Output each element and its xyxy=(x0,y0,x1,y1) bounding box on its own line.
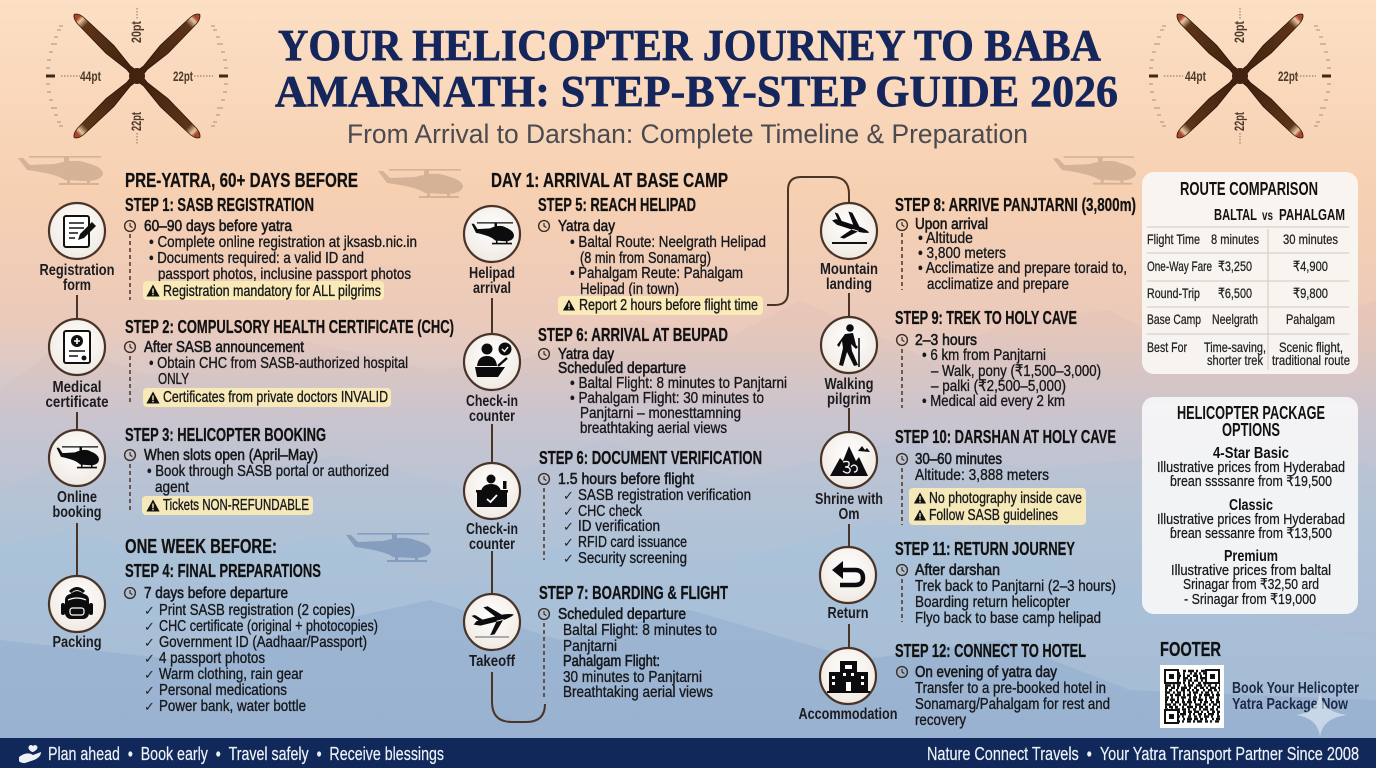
rotor decoration right: 22pt xyxy=(1231,112,1247,131)
label: check-in counter: Check-in xyxy=(466,393,518,410)
step 10: No photography inside cave xyxy=(929,490,1082,507)
call to action xyxy=(1232,680,1359,737)
step 2: After SASB announcement xyxy=(144,339,304,356)
panel: route comparison: ROUTE COMPARISON xyxy=(1180,179,1318,199)
subtitle: From Arrival to Darshan: Complete Timeline & Preparation xyxy=(347,119,1028,149)
icon: packing xyxy=(49,576,105,632)
label: registration form xyxy=(40,262,114,294)
step 7: Baltal Flight: 8 minutes to xyxy=(563,622,717,639)
label: mountain landing: Mountain xyxy=(820,261,878,278)
step 5: Yatra day xyxy=(558,218,615,235)
label: check-in counter 2: counter xyxy=(469,536,515,553)
label: medical certificate: certificate xyxy=(46,394,109,411)
panel: route comparison: Pahalgam xyxy=(1286,311,1335,327)
step 3: • Book through SASB portal or authorized xyxy=(147,463,389,480)
step 4: ✓ xyxy=(144,684,155,699)
step 4: ✓ xyxy=(144,604,155,619)
panel: route comparison: One-Way Fare xyxy=(1147,258,1212,274)
panel: route comparison: ₹4,900 xyxy=(1293,258,1328,274)
label: registration form: form xyxy=(63,277,91,294)
footer bar: Plan ahead • Book early • Travel safely • Receive blessings xyxy=(48,744,444,764)
step 6 verification: CHC check xyxy=(578,503,643,520)
step 6 arrival: STEP 6: ARRIVAL AT BEUPAD xyxy=(538,325,728,345)
icon: medical certificate xyxy=(49,319,105,375)
label: medical certificate xyxy=(46,379,109,411)
step 7: Scheduled departure xyxy=(558,606,686,623)
step 5: Report 2 hours before flight time xyxy=(579,297,758,314)
step 8: STEP 8: ARRIVE PANJTARNI (3,800m) xyxy=(895,195,1136,215)
panel: helicopter package options: 4-Star Basic xyxy=(1213,445,1289,462)
step 6 arrival xyxy=(538,325,787,437)
label: online booking: Online xyxy=(57,489,97,506)
panel: helicopter package options: ɓrean sessanre from ₹13,500 xyxy=(1170,525,1332,542)
step 4: ✓ xyxy=(144,652,155,667)
step 1 xyxy=(125,195,417,300)
step 1: • Complete online registration at jksasb.nic.in xyxy=(149,234,417,251)
step 5: Helipad (in town) xyxy=(580,281,679,298)
label: packing: Packing xyxy=(52,634,102,651)
step 6 verification: ✓ xyxy=(563,552,574,567)
step 9 xyxy=(895,308,1101,410)
step 4: Power bank, water bottle xyxy=(159,698,306,715)
step 10: Altitude: 3,888 meters xyxy=(915,467,1049,484)
step 2: STEP 2: COMPULSORY HEALTH CERTIFICATE (CHC) xyxy=(125,317,454,337)
rotor decoration right: 20pt xyxy=(1231,21,1247,43)
step 10: Follow SASB guidelines xyxy=(929,507,1058,524)
step 5: (8 min from Sonamarg) xyxy=(580,250,711,267)
panel: helicopter package options: OPTIONS xyxy=(1222,420,1280,440)
step 7: Pahalgam Flight: xyxy=(563,653,660,670)
panel: route comparison: Best For xyxy=(1147,339,1187,355)
step 6 verification: ✓ xyxy=(563,520,574,535)
step 6 verification xyxy=(539,448,762,567)
label: accommodation: Accommodation xyxy=(798,706,898,723)
step 8 xyxy=(895,195,1136,293)
step 10: 30–60 minutes xyxy=(915,451,1002,468)
icon: takeoff xyxy=(464,594,520,650)
icon: shrine with Om xyxy=(821,432,877,488)
step 6 arrival: • Pahalgam Flight: 30 minutes to xyxy=(570,390,764,407)
step 11: Boarding return helicopter xyxy=(915,594,1071,611)
panel: helicopter package options: Illustrative prices from Hyderabad xyxy=(1157,459,1345,476)
step 3: agent xyxy=(155,479,189,496)
step 11: STEP 11: RETURN JOURNEY xyxy=(895,539,1075,559)
label: takeoff: Takeoff xyxy=(469,653,516,670)
step 4 xyxy=(125,561,378,715)
panel: helicopter package options: Srinagar from ₹32,50 ard xyxy=(1183,576,1319,593)
step 4: ✓ xyxy=(144,620,155,635)
step 8: • Acclimatize and prepare toraid to, xyxy=(918,260,1127,277)
label: shrine with Om: Om xyxy=(838,506,860,523)
step 12: recovery xyxy=(915,712,966,729)
rotor decoration right: 44pt xyxy=(1185,68,1206,84)
label: mountain landing xyxy=(820,261,878,293)
call to action: Yatra Package Now xyxy=(1232,696,1349,713)
panel: route comparison: traditional route xyxy=(1272,352,1350,368)
step 2: Certificates from private doctors INVALID xyxy=(163,389,388,406)
QR code xyxy=(1160,665,1224,728)
connectors xyxy=(77,177,849,722)
label: check-in counter: counter xyxy=(469,408,515,425)
step 5: • Baltal Route: Neelgrath Helipad xyxy=(570,234,766,251)
step 6 verification: Security screening xyxy=(578,550,687,567)
label: helipad arrival: Helipad xyxy=(469,265,515,282)
step 6 arrival: • Baltal Flight: 8 minutes to Panjtarni xyxy=(570,375,787,392)
step 7 xyxy=(539,583,728,701)
step 11: Trek back to Panjtarni (2–3 hours) xyxy=(915,578,1116,595)
panel: route comparison: Neelgrath xyxy=(1212,311,1258,327)
step 5 xyxy=(538,195,766,315)
panel: helicopter package options: Illustrative prices from Hyderabad xyxy=(1157,511,1345,528)
step 11: Flyo back to base camp helipad xyxy=(915,610,1101,627)
step 3 xyxy=(125,425,389,515)
label: medical certificate: Medical xyxy=(52,379,102,396)
step 4: Warm clothing, rain gear xyxy=(159,666,304,683)
icon: walking pilgrim xyxy=(821,317,877,373)
step 3: Tickets NON-REFUNDABLE xyxy=(163,497,309,514)
step 9: – palki (₹2,500–5,000) xyxy=(931,378,1066,395)
icon: return xyxy=(820,547,876,603)
column 1 heading: PRE-YATRA, 60+ DAYS BEFORE xyxy=(125,170,358,192)
rotor decoration right: 22pt xyxy=(1278,68,1298,84)
icon: verification desk xyxy=(464,463,520,519)
step 6 verification: RFID card issuance xyxy=(578,534,687,551)
panel: helicopter package options xyxy=(1142,397,1358,614)
step 9: STEP 9: TREK TO HOLY CAVE xyxy=(895,308,1077,328)
rotor decoration left: 20pt xyxy=(128,21,144,43)
step 6 verification: STEP 6: DOCUMENT VERIFICATION xyxy=(539,448,762,468)
step 1: passport photos, inclusine passport photos xyxy=(158,266,411,283)
icon: helipad arrival xyxy=(464,206,520,262)
footer heading: FOOTER xyxy=(1160,639,1221,661)
footer bar xyxy=(0,738,1376,768)
one week heading: ONE WEEK BEFORE: xyxy=(125,536,277,558)
panel: route comparison: shorter trek xyxy=(1207,352,1264,368)
label: check-in counter 2 xyxy=(466,521,518,553)
step 6 verification: 1.5 hours before flight xyxy=(558,471,694,488)
panel: route comparison: PAHALGAM xyxy=(1279,207,1345,224)
step 6 verification: SASB registration verification xyxy=(578,487,751,504)
icon: check-in counter with person xyxy=(464,334,520,390)
step 4: STEP 4: FINAL PREPARATIONS xyxy=(125,561,321,581)
panel: route comparison: BALTAL xyxy=(1214,207,1257,224)
step 2 xyxy=(125,317,454,407)
label: check-in counter 2: Check-in xyxy=(466,521,518,538)
step 7: 30 minutes to Panjtarni xyxy=(563,669,702,686)
step 5: • Pahalgam Reute: Pahalgam xyxy=(570,265,743,282)
panel: route comparison: ₹9,800 xyxy=(1293,285,1328,301)
icon: online booking xyxy=(49,430,105,486)
title xyxy=(275,21,1118,116)
step 12: On evening of yatra day xyxy=(915,664,1057,681)
panel: route comparison xyxy=(1142,172,1358,374)
label: helipad arrival: arrival xyxy=(473,280,511,297)
panel: route comparison: vs xyxy=(1262,207,1273,223)
step 4: 4 passport photos xyxy=(159,650,265,667)
step 6 arrival: Yatra day xyxy=(558,346,614,363)
step 12: STEP 12: CONNECT TO HOTEL xyxy=(895,641,1086,661)
title: AMARNATH: STEP-BY-STEP GUIDE 2026 xyxy=(275,67,1118,116)
panel: route comparison: Base Camp xyxy=(1147,311,1201,327)
label: mountain landing: landing xyxy=(826,276,872,293)
panel: route comparison: Round-Trip xyxy=(1147,285,1200,301)
step 1: 60–90 days before yatra xyxy=(144,218,292,235)
step 6 verification: ✓ xyxy=(563,536,574,551)
panel: route comparison: ₹6,500 xyxy=(1218,285,1252,301)
label: shrine with Om: Shrine with xyxy=(815,491,883,508)
step 4: ✓ xyxy=(144,700,155,715)
step 4: Personal medications xyxy=(159,682,287,699)
panel: route comparison: Scenic flight, xyxy=(1279,339,1343,355)
label: online booking xyxy=(52,489,102,521)
label: registration form: Registration xyxy=(40,262,114,279)
icon: registration form xyxy=(49,203,105,259)
step 7: STEP 7: BOARDING & FLIGHT xyxy=(539,583,728,603)
label: return: Return xyxy=(828,605,868,622)
step 2: ONLY xyxy=(158,371,189,388)
step 11: After darshan xyxy=(915,562,1000,579)
panel: route comparison: 30 minutes xyxy=(1283,231,1338,247)
step 8: • Altitude xyxy=(918,230,973,247)
step 1: • Documents required: a valid ID and xyxy=(149,250,364,267)
step 12 xyxy=(895,641,1110,729)
step 4: ✓ xyxy=(144,636,155,651)
step 4: Print SASB registration (2 copies) xyxy=(159,602,355,619)
panel: route comparison: Flight Time xyxy=(1147,231,1200,247)
step 9: • 6 km from Panjtarni xyxy=(922,347,1046,364)
panel: route comparison: 8 minutes xyxy=(1211,231,1259,247)
step 2: • Obtain CHC from SASB-authorized hospital xyxy=(149,355,408,372)
label: shrine with Om xyxy=(815,491,883,523)
step 6 verification: ✓ xyxy=(563,505,574,520)
step 4: 7 days before departure xyxy=(144,585,288,602)
step 3: When slots open (April–May) xyxy=(144,447,318,464)
rotor decoration left: 22pt xyxy=(173,68,193,84)
panel: helicopter package options: Premium xyxy=(1224,548,1278,565)
icon: mountain landing xyxy=(821,203,877,259)
title: YOUR HELICOPTER JOURNEY TO BABA xyxy=(278,21,1101,70)
step 12: Transfer to a pre-booked hotel in xyxy=(915,680,1106,697)
step 3: STEP 3: HELICOPTER BOOKING xyxy=(125,425,326,445)
step 1: STEP 1: SASB REGISTRATION xyxy=(125,195,314,215)
rotor decoration left xyxy=(46,8,228,144)
step 7: Breathtaking aerial views xyxy=(563,684,713,701)
step 7: Panjtarni xyxy=(563,638,617,655)
panel: helicopter package options: Illustrative prices from baltal xyxy=(1171,562,1331,579)
step 8: • 3,800 meters xyxy=(918,245,1006,262)
rotor decoration right xyxy=(1149,8,1331,144)
label: online booking: booking xyxy=(52,504,102,521)
panel: helicopter package options: - Srinagar from ₹19,000 xyxy=(1184,591,1316,608)
step 10: STEP 10: DARSHAN AT HOLY CAVE xyxy=(895,427,1116,447)
step 6 arrival: breathtaking aerial views xyxy=(580,420,727,437)
step 4: CHC certificate (original + photocopies) xyxy=(159,618,378,635)
step 8: Upon arrival xyxy=(915,216,988,233)
panel: helicopter package options: Classic xyxy=(1229,497,1273,514)
step 10 xyxy=(895,427,1116,525)
label: check-in counter xyxy=(466,393,518,425)
step 9: – Walk, pony (₹1,500–3,000) xyxy=(931,363,1101,380)
step 1: Registration mandatory for ALL pilgrims xyxy=(163,283,381,300)
step 8: acclimatize and prepare xyxy=(927,276,1069,293)
column 2 heading: DAY 1: ARRIVAL AT BASE CAMP xyxy=(491,170,728,192)
panel: helicopter package options: ɓrean ssssanre from ₹19,500 xyxy=(1170,473,1332,490)
step 12: Sonamarg/Pahalgam for rest and xyxy=(915,696,1110,713)
step 4: Government ID (Aadhaar/Passport) xyxy=(159,634,367,651)
step 11 xyxy=(895,539,1116,627)
panel: route comparison: Time-saving, xyxy=(1204,339,1266,355)
step 9: • Medical aid every 2 km xyxy=(922,393,1065,410)
step 6 arrival: Scheduled departure xyxy=(558,360,686,377)
step 9: 2–3 hours xyxy=(915,332,977,349)
label: walking pilgrim: Walking xyxy=(824,376,874,393)
rotor decoration left: 22pt xyxy=(128,112,144,131)
step 6 verification: ID verification xyxy=(578,518,660,535)
rotor decoration left: 44pt xyxy=(80,68,101,84)
step 5: STEP 5: REACH HELIPAD xyxy=(538,195,696,215)
step 6 verification: ✓ xyxy=(563,489,574,504)
panel: route comparison: ₹3,250 xyxy=(1218,258,1252,274)
icon: accommodation xyxy=(820,648,876,704)
step 6 arrival: Panjtarni – monesttamning xyxy=(580,405,741,422)
label: walking pilgrim: pilgrim xyxy=(827,391,871,408)
step 4: ✓ xyxy=(144,668,155,683)
label: helipad arrival xyxy=(469,265,515,297)
label: walking pilgrim xyxy=(824,376,874,408)
